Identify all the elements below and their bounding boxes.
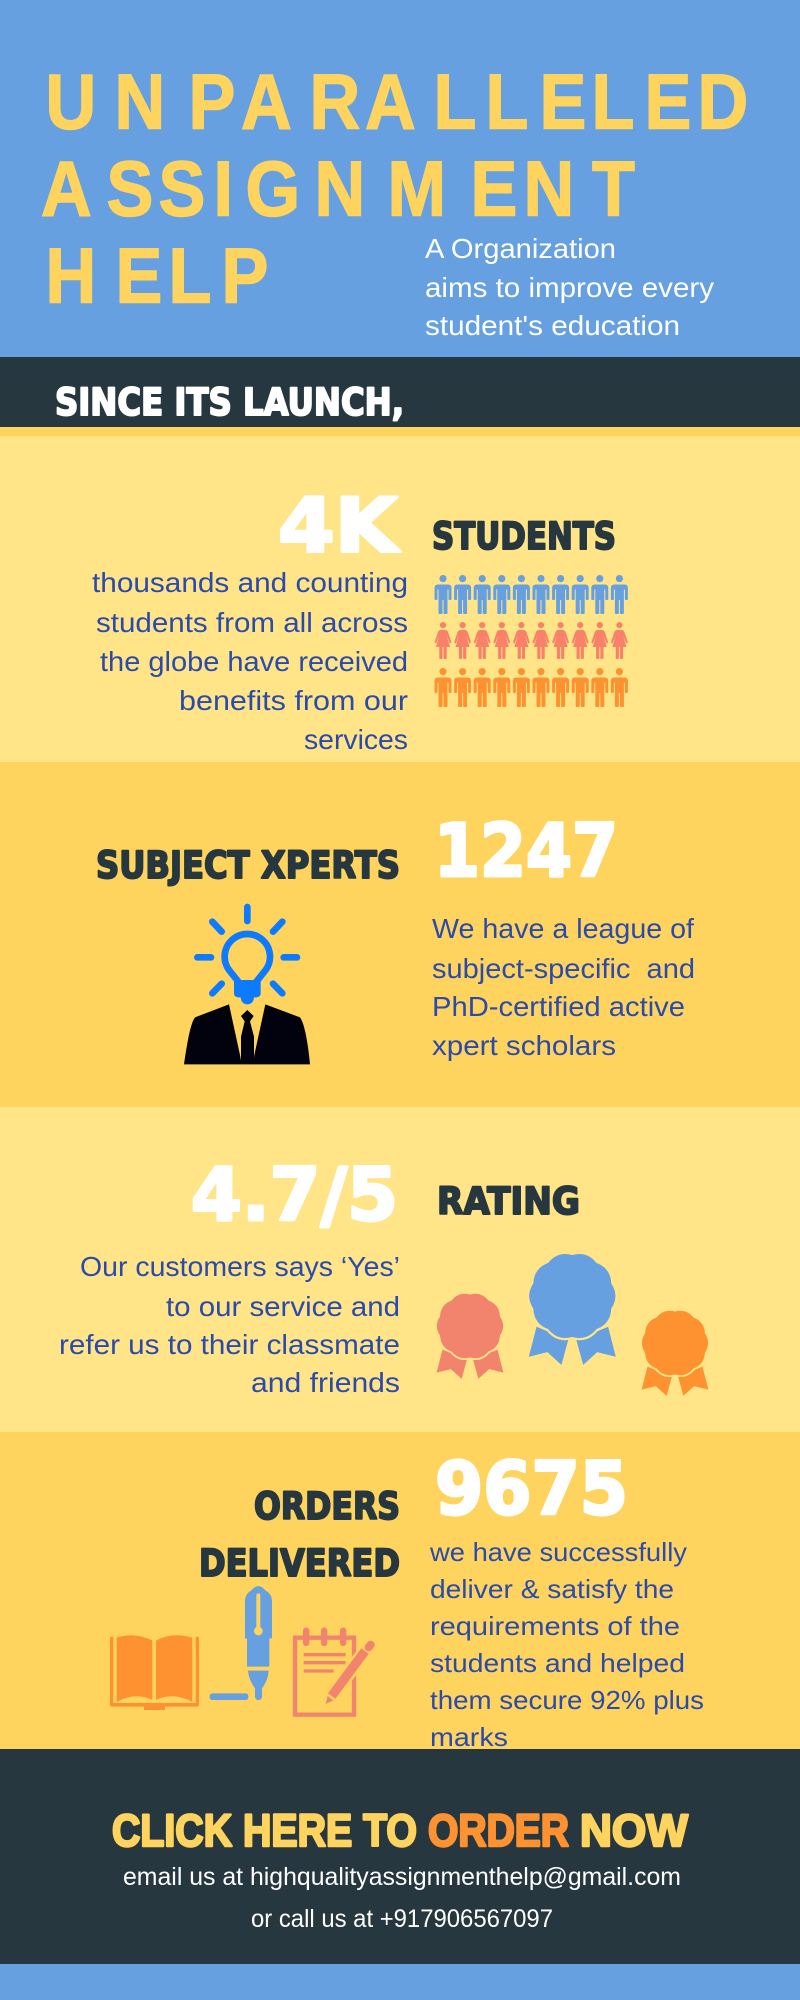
heading: orders delivered: ORDERS (254, 1485, 400, 1528)
title: HELP (46, 232, 268, 319)
footer band (0, 1964, 800, 2000)
icon: fountain pen (210, 1586, 272, 1700)
heading: subject xperts: SUBJECT XPERTS (96, 844, 400, 887)
heading: orders delivered: DELIVERED (199, 1542, 400, 1585)
experts description (432, 913, 695, 1061)
heading: students: STUDENTS (432, 515, 616, 558)
experts description: subject-specific and (432, 953, 695, 984)
icon: notepad and pencil (295, 1627, 371, 1715)
orders description: students and helped (430, 1648, 685, 1678)
icon: orange rosette (641, 1310, 709, 1396)
stat: 9675: 9675 (435, 1447, 628, 1532)
rating description: and friends (251, 1367, 400, 1398)
icon: red rosette (436, 1293, 504, 1379)
experts description: xpert scholars (432, 1030, 616, 1061)
panel: subject experts (0, 762, 800, 1107)
heading: orders delivered (199, 1485, 400, 1585)
heading: rating: RATING (437, 1180, 580, 1223)
call to action heading (112, 1805, 689, 1856)
orders description: marks (430, 1722, 508, 1752)
orders description: we have successfully (429, 1537, 687, 1567)
contact details: or call us at +917906567097 (251, 1905, 553, 1933)
rating description (59, 1251, 400, 1398)
title: ASSIGNMENT (41, 145, 635, 232)
call to action heading: CLICK HERE TO (112, 1805, 417, 1856)
students description: the globe have received (100, 646, 408, 677)
title: UNPARALLELED (46, 58, 748, 145)
panel: call to action (0, 1749, 800, 1964)
panel: since its launch banner (0, 357, 800, 436)
panel: rating (0, 1107, 800, 1432)
call to action heading: NOW (580, 1805, 689, 1856)
orders description: deliver & satisfy the (430, 1574, 674, 1604)
students description: benefits from our (179, 685, 408, 716)
subtitle: aims to improve every (425, 272, 714, 303)
icon: lightbulb-head businessman (184, 907, 310, 1064)
panel: orders delivered (0, 1432, 800, 1752)
subtitle (425, 233, 714, 341)
icon: blue rosette (528, 1253, 617, 1365)
contact details: email us at highqualityassignmenthelp@gmail.com (123, 1863, 681, 1891)
subtitle: A Organization (425, 233, 616, 264)
title (41, 58, 748, 319)
contact details (123, 1863, 681, 1933)
banner heading: SINCE ITS LAUNCH, (55, 381, 404, 424)
students description (92, 567, 408, 755)
students description: thousands and counting (92, 567, 408, 598)
experts description: We have a league of (432, 913, 694, 944)
panel: students (0, 436, 800, 762)
orders description: requirements of the (430, 1611, 680, 1641)
orders description (429, 1537, 704, 1752)
call to action heading: ORDER (428, 1805, 569, 1856)
stat: 1247: 1247 (434, 809, 618, 894)
experts description: PhD-certified active (432, 991, 685, 1022)
icon: people rows (434, 575, 628, 707)
rating description: to our service and (166, 1291, 400, 1322)
rating description: refer us to their classmate (59, 1329, 400, 1360)
subtitle: student's education (425, 310, 680, 341)
panel: header (0, 0, 800, 357)
icon: open book (110, 1635, 199, 1710)
orders description: them secure 92% plus (430, 1685, 704, 1715)
stat: 4.7/5: 4.7/5 (191, 1153, 398, 1238)
students description: students from all across (96, 607, 408, 638)
rating description: Our customers says ‘Yes’ (80, 1251, 400, 1282)
students description: services (304, 724, 408, 755)
stat: 4K: 4K (278, 482, 401, 570)
